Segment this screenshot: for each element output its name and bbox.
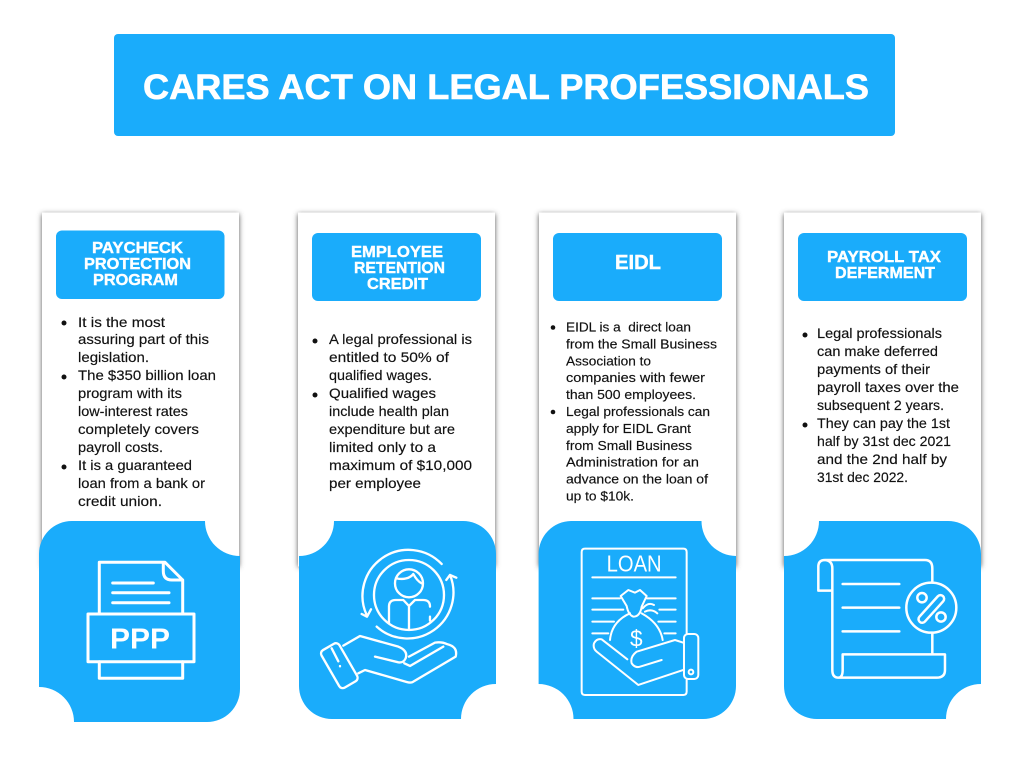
bullet list: employee retention credit: qualified wages. xyxy=(329,368,432,383)
bullet list: paycheck protection program: assuring part of this xyxy=(78,332,209,347)
bullet list: employee retention credit: maximum of $10,000 xyxy=(329,458,472,473)
bullet list: paycheck protection program: completely covers xyxy=(78,422,199,437)
bullet list: EIDL: apply for EIDL Grant xyxy=(566,422,692,436)
icon: PPP document xyxy=(88,562,194,678)
blue icon block xyxy=(299,521,496,719)
heading pill: EIDL: EIDL xyxy=(615,252,661,274)
heading pill: employee retention credit: CREDIT xyxy=(367,276,428,293)
bullet list: employee retention credit: include health plan xyxy=(329,404,449,419)
bullet list: paycheck protection program: loan from a bank or xyxy=(78,476,206,491)
bullet list: payroll tax deferment: half by 31st dec 2021 xyxy=(817,434,951,449)
bullet list: EIDL: from Small Business xyxy=(566,439,692,453)
bullet list: paycheck protection program: It is the most xyxy=(78,315,165,330)
heading pill: payroll tax deferment: DEFERMENT xyxy=(835,265,935,282)
title banner xyxy=(114,34,895,136)
bullet list: employee retention credit: Qualified wages xyxy=(329,386,436,401)
title: CARES ACT ON LEGAL PROFESSIONALS xyxy=(143,67,869,107)
bullet list: employee retention credit: limited only to a xyxy=(329,440,436,455)
bullet list: EIDL: than 500 employees. xyxy=(566,388,696,402)
bullet list: EIDL: Legal professionals can xyxy=(566,405,710,419)
bullet list: paycheck protection program: The $350 billion loan xyxy=(78,368,216,383)
heading pill: paycheck protection program xyxy=(56,230,224,299)
bullet list: payroll tax deferment: subsequent 2 years. xyxy=(817,398,944,413)
blue icon block xyxy=(39,521,240,722)
bullet list: EIDL: EIDL is a direct loan xyxy=(566,320,691,334)
bullet list: payroll tax deferment: and the 2nd half by xyxy=(817,452,947,467)
icon: tax scroll with percent xyxy=(818,560,956,678)
icon: loan document: LOAN xyxy=(607,551,662,577)
bullet list: payroll tax deferment: can make deferred xyxy=(817,344,938,359)
bullet list: EIDL: advance on the loan of xyxy=(566,473,709,487)
icon: loan document: $ xyxy=(630,626,643,652)
bullet list: payroll tax deferment: They can pay the 1st xyxy=(817,416,950,431)
icon: PPP document: PPP xyxy=(110,623,170,655)
bullet list: payroll tax deferment: payroll taxes over the xyxy=(817,380,959,395)
panel: EIDL xyxy=(539,212,736,719)
bullet list: EIDL: Association to xyxy=(566,354,651,368)
bullet list: EIDL xyxy=(551,320,717,504)
heading pill: employee retention credit: RETENTION xyxy=(354,260,445,277)
heading pill: paycheck protection program: PROGRAM xyxy=(93,272,178,289)
bullet list: employee retention credit: A legal professional is xyxy=(329,332,472,347)
heading pill: EIDL xyxy=(553,233,722,301)
blue icon block xyxy=(784,521,981,719)
blue icon block xyxy=(539,521,736,719)
bullet list: employee retention credit: per employee xyxy=(329,476,421,491)
bullet list: paycheck protection program: credit union. xyxy=(78,494,162,509)
bullet list: employee retention credit: entitled to 50% of xyxy=(329,350,449,365)
bullet list: EIDL: Administration for an xyxy=(566,456,699,470)
bullet list: paycheck protection program: payroll costs. xyxy=(78,440,163,455)
icon: loan document xyxy=(582,549,698,695)
icon: hand holding employee xyxy=(320,550,456,690)
panel: payroll tax deferment xyxy=(784,212,981,719)
bullet list: payroll tax deferment: 31st dec 2022. xyxy=(817,470,908,485)
panel: employee retention credit xyxy=(298,212,496,719)
bullet list: paycheck protection program: program with its xyxy=(78,386,182,401)
bullet list: EIDL: companies with fewer xyxy=(566,371,705,385)
bullet list: EIDL: from the Small Business xyxy=(566,337,717,351)
heading pill: payroll tax deferment: PAYROLL TAX xyxy=(827,249,941,266)
heading pill: paycheck protection program: PROTECTION xyxy=(84,256,191,273)
bullet list: payroll tax deferment: payments of their xyxy=(817,362,931,377)
bullet list: employee retention credit xyxy=(312,332,472,491)
heading pill: employee retention credit xyxy=(312,233,481,301)
bullet list: payroll tax deferment xyxy=(802,326,959,485)
heading pill: payroll tax deferment xyxy=(798,233,967,301)
panel: paycheck protection program xyxy=(39,212,240,722)
bullet list: paycheck protection program: It is a guaranteed xyxy=(78,458,192,473)
heading pill: employee retention credit: EMPLOYEE xyxy=(351,244,443,261)
bullet list: payroll tax deferment: Legal professionals xyxy=(817,326,942,341)
bullet list: employee retention credit: expenditure but are xyxy=(329,422,455,437)
bullet list: EIDL: up to $10k. xyxy=(566,490,634,504)
bullet list: paycheck protection program: legislation. xyxy=(78,350,149,365)
heading pill: paycheck protection program: PAYCHECK xyxy=(92,240,183,257)
bullet list: paycheck protection program xyxy=(62,315,216,509)
bullet list: paycheck protection program: low-interest rates xyxy=(78,404,188,419)
